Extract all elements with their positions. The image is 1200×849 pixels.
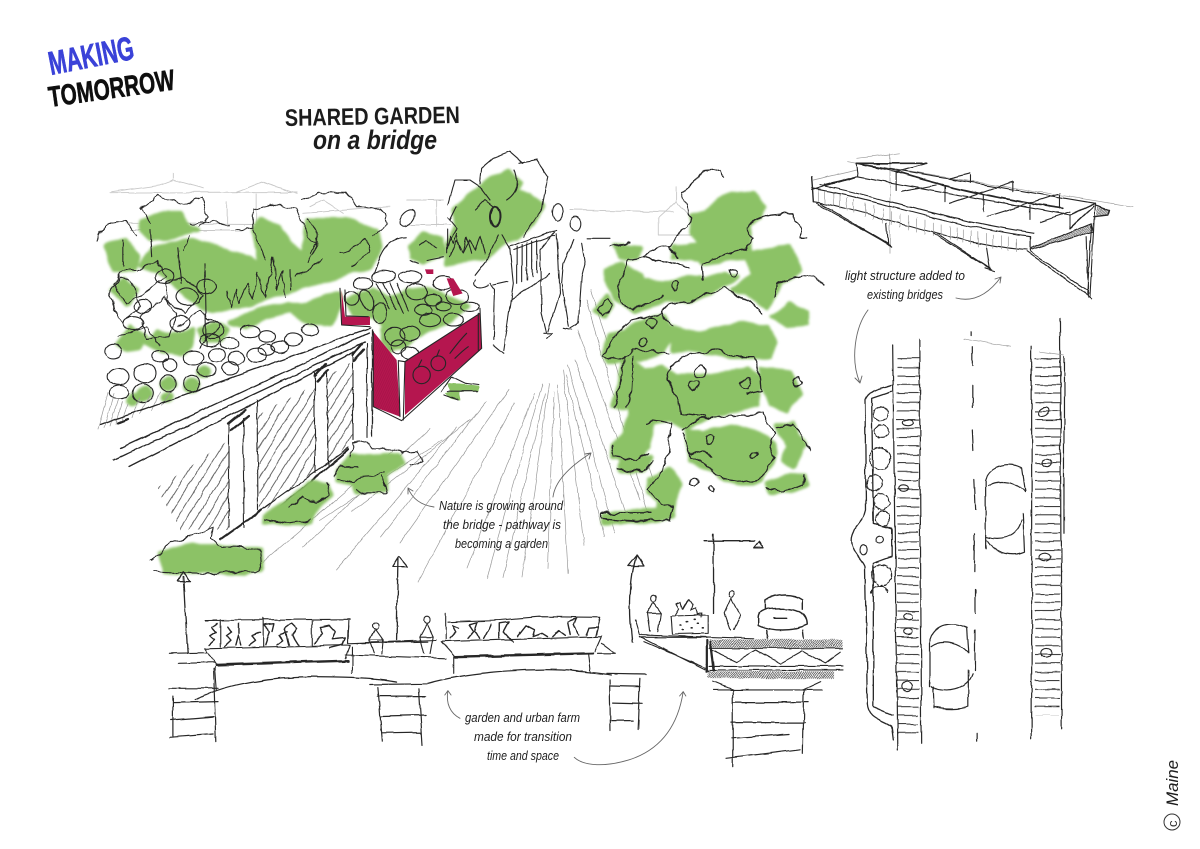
arrow: to the right tree [553, 453, 591, 497]
signature: Maine [1163, 760, 1182, 806]
cars [930, 465, 1025, 709]
bridge elevation drawing [169, 556, 647, 745]
green wash: left hedge [107, 213, 443, 404]
right tree: ink outlines [597, 170, 823, 522]
plan view of the bridge [852, 318, 1064, 750]
green wash: tree behind the crate [447, 172, 542, 263]
deck perspective plank lines [263, 290, 662, 582]
annotation: nature is growing [439, 499, 564, 551]
signature [1163, 760, 1182, 830]
signature: c [1165, 820, 1180, 827]
annotation: light structure: existing bridges [867, 288, 943, 302]
title [285, 102, 460, 155]
balcony shrubs [867, 406, 894, 708]
annotation: garden and urban farm: garden and urban farm [465, 711, 580, 725]
logo: Making Tomorrow [45, 29, 177, 114]
road edges and centre line [893, 318, 1064, 750]
left hedge stems and round shrubs [105, 207, 472, 403]
left hedge ink [97, 193, 387, 347]
far bridge railing [510, 230, 610, 300]
title: on a bridge [313, 125, 437, 155]
walkway and planter troughs [169, 637, 615, 690]
annotation: light structure [845, 269, 965, 302]
tree and figures behind the crate [447, 152, 610, 353]
people on the walkway [370, 617, 433, 654]
bridge cross-section drawing [628, 533, 843, 767]
section pier [726, 690, 809, 767]
crate: red planter box [340, 269, 482, 421]
arches and piers [169, 668, 647, 745]
arrow: to the plan balcony [855, 310, 868, 383]
bushes on the deck and railing foot [152, 442, 422, 573]
annotation: nature is growing: becoming a garden [455, 537, 548, 551]
right tree: green wash [597, 193, 807, 522]
annotation: garden and urban farm: time and space [487, 749, 559, 763]
street lamps [178, 556, 408, 653]
people from above [860, 405, 1052, 692]
sidewalk hatching [897, 352, 1060, 737]
arrow: to the section [574, 692, 686, 765]
arrow: to the left arch [445, 691, 460, 718]
logo: Making Tomorrow: MAKING [45, 29, 137, 82]
annotation: light structure: light structure added to [845, 269, 965, 283]
city skyline background [110, 173, 692, 235]
figure: woman at crate [474, 207, 513, 353]
lamps on section [628, 533, 764, 642]
perspective sketch of the light structure [812, 153, 1133, 298]
annotation: nature is growing: the bridge - pathway is [443, 518, 561, 532]
arrow: to the deck bush [408, 488, 434, 507]
section deck and truss [635, 620, 843, 690]
figure: walkers [540, 205, 585, 338]
arrow: to the structure sketch [956, 277, 1001, 299]
title: SHARED GARDEN [285, 102, 460, 132]
crate's small bush on deck [441, 377, 479, 400]
car seen from behind [758, 595, 807, 638]
garden frames and plants [205, 613, 600, 648]
crate: planted vegetables [344, 271, 479, 360]
hatching below the hedge [98, 392, 170, 430]
annotation: garden and urban farm [465, 711, 580, 763]
annotation: garden and urban farm: made for transition [474, 730, 572, 744]
logo: Making Tomorrow: TOMORROW [47, 65, 177, 114]
tree outline [447, 152, 548, 257]
people and planter [647, 590, 740, 634]
railing: handrail, posts and balustrade hatching [100, 328, 372, 540]
annotation: nature is growing: Nature is growing around [439, 499, 564, 513]
balcony outline [852, 385, 893, 740]
